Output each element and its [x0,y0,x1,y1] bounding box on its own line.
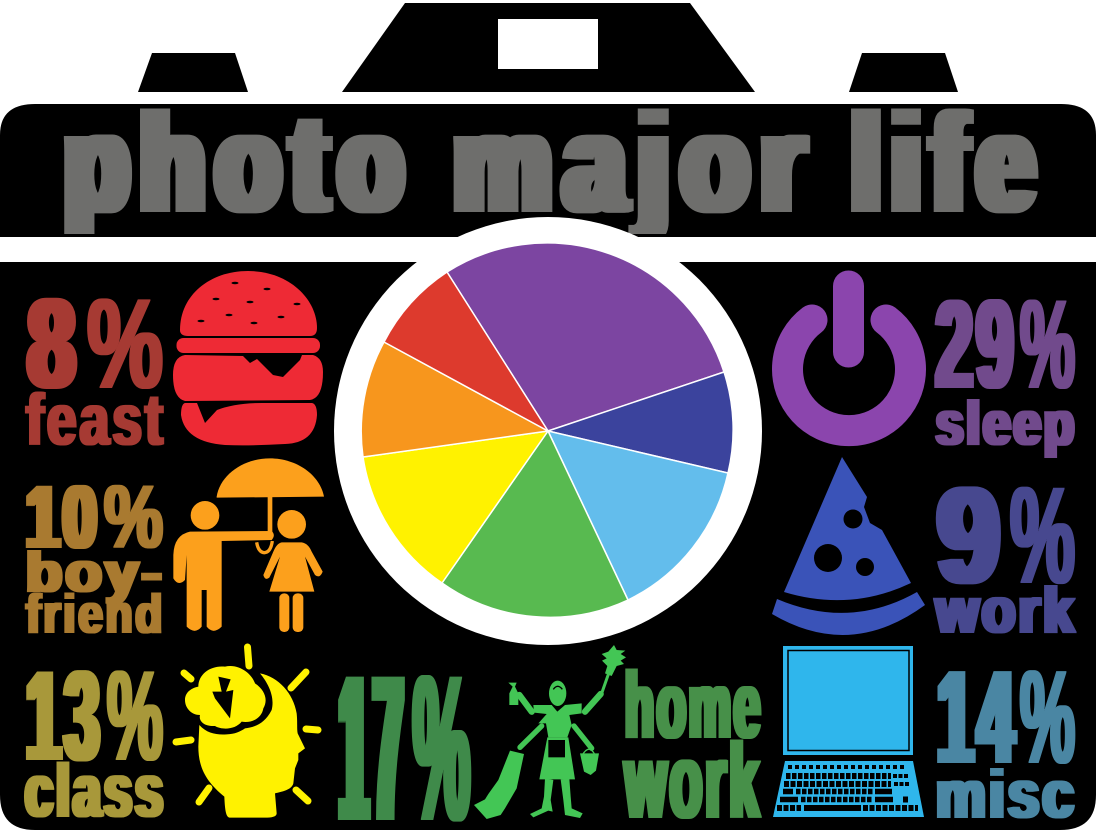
panel: work 9% [772,457,1077,646]
icon: power button [788,286,910,431]
stat: 10% boyfriend: friend [26,582,165,644]
icon: laptop [773,646,924,817]
panel: misc 14% [773,644,1077,832]
stat: 10% boyfriend: boy- [26,540,165,604]
stat: 17% [341,632,470,836]
icon: burger [173,271,323,445]
icon: multitasking maid [474,645,626,819]
icon: head with idea [176,647,318,818]
title: major [454,84,817,241]
stat: 13% class: 13 [26,644,103,786]
stat: 14% misc [936,644,1077,832]
stat: 8% feast: % [87,272,163,414]
icon: pizza slice [772,457,925,635]
stat: 8% feast: feast [26,380,166,460]
pie chart [361,243,733,617]
icon: couple under umbrella [173,458,324,632]
stat: 8% feast: 8 [28,272,75,414]
stat: 10% boyfriend [26,466,165,644]
viewfinder window [498,19,598,69]
lens ring [334,217,762,645]
panel: feast 8% [26,271,323,460]
stat: 13% class: % [107,644,163,786]
stat: 10% boyfriend: % [104,466,163,566]
stat: 8% feast [26,272,166,460]
panel: sleep 29% [788,276,1077,458]
stat: 29% sleep: 29 [936,276,1017,414]
stat: 10% boyfriend: 10 [26,466,100,566]
stat: home work [625,652,763,836]
stat: 14% misc: 14 [937,644,1018,790]
stat: 13% class [25,644,166,832]
stat: 9% work [935,460,1077,646]
title: photo [65,84,415,241]
camera infographic: home [625,652,763,758]
title [64,108,1038,234]
stat: 13% class: class [25,748,166,832]
panel: boyfriend 10% [26,458,324,644]
panel: class 13% [25,644,318,832]
stat: 9% work: 9 [938,460,999,612]
